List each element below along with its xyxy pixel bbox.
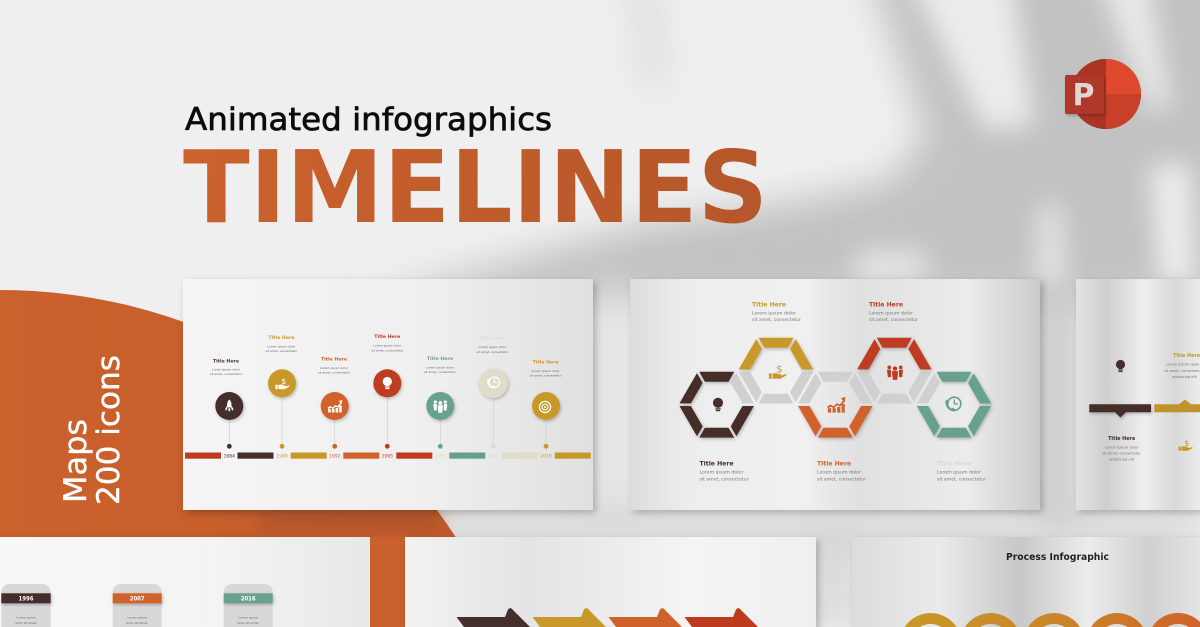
titles and captions: Lorem ipsum dolor [373,344,402,348]
hexagon captions: Lorem ipsum dolor [752,310,796,316]
card: 2007: dolor sit amet, [126,621,148,625]
arrow: red [684,608,758,627]
hexagon captions: sit amet, consectetur [817,476,866,482]
titles and captions: Lorem ipsum dolor [267,344,296,348]
icon: bulb [1116,360,1125,372]
hexagon icons [713,364,961,413]
titles and captions: Title Here [533,360,559,366]
titles and captions [210,334,562,378]
caption: brown: Lorem ipsum dolor [1105,445,1139,449]
titles and captions: sit amet, consectetur [530,374,562,378]
hexagon captions: sit amet, consectetur [869,317,918,323]
hexagon captions: Title Here [937,460,972,468]
caption: brown: sit amet, consectetur [1103,452,1141,456]
titles and captions: Lorem ipsum dolor [320,366,349,370]
card: 2016: Lorem ipsum [238,615,258,619]
card: 1996: dolor sit amet, [15,621,37,625]
panel: circle timeline [183,279,593,510]
icon: PowerPoint logo: P [1072,78,1094,113]
titles and captions: Title Here [268,335,295,341]
text: Maps 200 icons: 200 icons [91,355,127,505]
caption: brown: adipiscing elit [1109,458,1135,462]
rings [905,613,1200,627]
icon: PowerPoint logo [1065,59,1141,129]
hexagon: brown [679,372,754,438]
card: 2016: dolor sit amet, [237,621,259,625]
hexagon captions: Lorem ipsum dolor [937,470,981,476]
arrow: gold [532,608,606,627]
caption: gold [1164,353,1200,379]
hexagon captions: Title Here [700,460,734,468]
hexagon captions: sit amet, consectetur [700,476,749,482]
stems and dots [227,397,548,449]
titles and captions: Lorem ipsum dolor [479,345,507,349]
titles and captions: sit amet, consectetur [266,349,298,353]
brown bar [1089,404,1151,418]
titles and captions: sit amet, consectetur [477,350,509,354]
caption: brown: Title Here [1108,436,1136,442]
card: 2007: 2007 [130,596,145,603]
caption: gold: Lorem ipsum dolor [1166,363,1200,367]
hexagon captions: Lorem ipsum dolor [700,470,744,476]
text: Maps 200 icons [58,355,127,505]
caption: brown [1103,436,1141,462]
orange column between panels [370,537,406,627]
hexagon captions: sit amet, consectetur [937,476,986,482]
caption: gold: Title Here [1173,353,1200,359]
hexagon captions [700,300,986,482]
icon: hand [1178,439,1193,451]
card: 2016: 2016 [241,596,256,603]
card: 1996: 1996 [18,596,34,603]
orange circular backdrop [0,290,456,627]
years: 1995 [382,454,393,460]
card: 1996 [1,584,51,627]
card: 2016 [224,584,273,627]
card: 2007 [113,584,162,627]
years: 1989 [276,454,288,460]
titles and captions: sit amet, consectetur [424,370,457,374]
timeline bars [185,452,591,459]
panel: hexagon chain [630,279,1040,510]
caption: gold: adipiscing elit [1172,375,1198,379]
titles and captions: Title Here [480,336,506,342]
heading: Process Infographic [1006,552,1109,563]
hexagon: orange [798,401,873,438]
titles and captions: Lorem ipsum dolor [532,369,560,373]
arrow: orange [608,608,682,627]
hexagon captions: Title Here [752,300,787,308]
titles and captions: sit amet, consectetur [318,371,351,375]
grey hexagon segments [728,367,943,408]
years: 2008 [488,454,499,460]
title: TIMELINES [183,131,768,246]
titles and captions: sit amet, consectetur [371,348,404,352]
arrow: brown [456,608,530,627]
hexagon captions: Lorem ipsum dolor [869,310,913,316]
text: Maps 200 icons: Maps [58,419,94,503]
panel: arrows [405,537,816,627]
titles and captions: Title Here [213,358,239,364]
titles and captions: Title Here [321,357,347,363]
titles and captions: sit amet, consectetur [210,372,243,376]
years: 1992 [329,454,341,460]
hexagon captions: sit amet, consectetur [752,317,801,323]
years: 1984 [224,454,235,460]
circles with icons [215,369,560,420]
hexagon: red [857,338,932,374]
titles and captions: Lorem ipsum dolor [426,366,455,370]
hexagon captions: Title Here [817,460,852,468]
subtitle: Animated infographics [185,102,552,138]
card: 1996: Lorem ipsum [16,615,36,619]
titles and captions: Title Here [374,334,400,340]
hexagon: gold [739,338,813,374]
panel: year cards [0,537,370,627]
hexagon captions: Title Here [869,300,904,308]
titles and captions: Lorem ipsum dolor [212,368,241,372]
panel: process infographic [852,537,1200,627]
gold bar [1154,400,1200,412]
years: 2019 [540,454,552,460]
years [224,454,552,460]
card: 2007: Lorem ipsum [127,615,147,619]
panel: cropped bar timeline [1076,279,1200,510]
hexagon: teal [917,372,991,438]
hexagon captions: Lorem ipsum dolor [817,470,861,476]
years: 2002 [435,454,446,460]
titles and captions: Title Here [427,356,453,362]
